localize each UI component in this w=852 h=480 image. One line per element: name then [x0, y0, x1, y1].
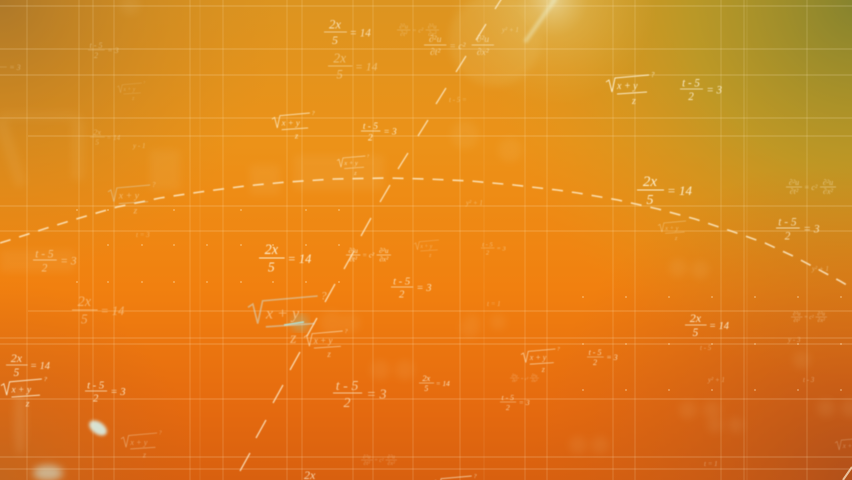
- equation: wave equation top wide: ∂²u: [476, 34, 489, 45]
- equation: 2x over 5 = 14 grey: 2x: [78, 294, 92, 310]
- equation: wave equation bottom faint: ∂²u: [363, 455, 371, 461]
- equation: 2x over 5 = 14 bright: 5: [646, 193, 654, 208]
- equation: wave equation bottom faint: [361, 455, 397, 467]
- equation: wave equation bottom faint: ∂²u: [388, 455, 395, 461]
- equation: root of x+y over z faint: x + y: [122, 87, 136, 93]
- tiny faint equation fragments: t = 1: [487, 300, 501, 308]
- equation: root of x+y over z grey: z: [132, 205, 137, 216]
- equation: root of x+y over z faint center: [414, 240, 439, 259]
- equation: 2x over 5 = 14 small: 5: [424, 384, 428, 393]
- equation: 2x over 5 = 14 small faint: = 14: [106, 134, 121, 142]
- equation: 2x over 5 = 14 faint: 5: [337, 68, 343, 82]
- equation: wave equation bottom faint: ∂x²: [388, 461, 395, 467]
- equation: t-5 over 2 = 3 center: t - 5: [393, 277, 411, 288]
- equation: root of x+y over z grey: x + y: [118, 191, 140, 202]
- equation: t-5 over 2 = 3: 2: [368, 133, 373, 143]
- equation: root of x+y over z faint center: x + y: [419, 244, 433, 250]
- equation: wave equation top faint: ∂²u: [428, 23, 437, 30]
- equation: 2x over 5 = 14 small: = 14: [436, 380, 450, 388]
- equation: root of x+y over z center: ?: [344, 328, 348, 335]
- equation: t-5 over 2 = 3 right: t - 5: [778, 216, 797, 228]
- equation: 2x over 5 = 14 faint: 2x: [333, 50, 346, 65]
- equation: wave equation top wide: ∂²u: [429, 34, 442, 45]
- equation: root top cut off at bottom: ?: [473, 473, 477, 480]
- equation: root of x+y over z: [272, 111, 316, 141]
- equation: 2x over 5 = 14 faint: [328, 50, 378, 82]
- tiny faint equation fragments: t = 1: [704, 460, 718, 468]
- equation: t-5 over 2 = 3 left: 2: [42, 262, 48, 274]
- tiny faint equation fragments: y - 3: [787, 336, 801, 344]
- tiny faint equation fragments: y² + 1: [501, 26, 519, 34]
- equation: root of x+y over z small: z: [353, 170, 357, 177]
- dashed arc: [0, 178, 852, 288]
- equation: 2x over 5 = 14 left: [6, 351, 50, 379]
- equation: root of x+y over z faint lower: z: [142, 450, 147, 459]
- equation: t-5 over 2 = 3: [361, 122, 397, 143]
- equation: 2x over 5 = 14 small: 2x: [422, 374, 431, 383]
- equation: wave equation lower center: ∂x²: [531, 378, 538, 384]
- equation: wave equation center: ∂²u: [379, 247, 389, 255]
- equation: wave equation center: [346, 247, 391, 263]
- tiny faint equation fragments: t = 3: [136, 231, 150, 239]
- equation: wave equation center: = c²: [362, 252, 375, 260]
- equation: root of x+y over z: x + y: [616, 81, 638, 92]
- equation: wave equation top wide: ∂x²: [477, 47, 490, 58]
- equation: t-5 over 2 = 3 small: t - 5: [502, 393, 514, 402]
- equation: wave equation top faint: ∂t²: [400, 31, 408, 38]
- equation: wave equation top faint: [397, 23, 439, 38]
- equation: root of x+y over z left: z: [25, 400, 30, 410]
- equation: t-5 over 2 = 3 large: = 3: [366, 386, 386, 402]
- equation: root of x+y over z grey: [108, 182, 156, 216]
- equation: root of x+y over z: ?: [312, 111, 316, 117]
- equation: t-5 over 2 = 3: = 3: [383, 128, 397, 138]
- equation: wave equation lower right: = c²: [804, 315, 814, 321]
- equation: wave equation top wide: ∂t²: [430, 47, 442, 58]
- equation: 2x over 5 = 14: [324, 18, 371, 47]
- equation: t-5 over 2 = 3 faint: [88, 41, 119, 60]
- equation: root of x+y over z on arc: x + y: [664, 225, 679, 232]
- equation: 2x over 5 = 14 center: 5: [268, 259, 275, 274]
- corner line fragment bottom right: [843, 467, 852, 480]
- equation: wave equation center: ∂t²: [349, 255, 358, 263]
- equation: t-5 over 2 = 3 small: = 3: [519, 398, 530, 407]
- equation: t-5 over 2 = 3: [680, 77, 723, 103]
- equation: wave equation center: ∂x²: [379, 255, 389, 263]
- equation: root of x+y over z faint lower: x + y: [129, 438, 148, 447]
- equation: t-5 over 2 = 3 left: t - 5: [35, 248, 54, 260]
- equation: root of x+y over z faint lower: ?: [159, 431, 162, 437]
- equation: t-5 over 2 = 3 right: [776, 216, 820, 242]
- equation: wave equation lower center: ∂²u: [512, 373, 518, 379]
- equation: t-5 over 2 = 3 small right: 2: [593, 358, 597, 367]
- equation: wave equation top faint: = c²: [412, 28, 424, 35]
- equation: wave equation lower center: ∂²u: [531, 373, 538, 379]
- tiny faint equation fragments: y - 1: [132, 142, 145, 150]
- equation: t-5 over 2 = 3 faint: 2: [94, 51, 98, 60]
- equation: t-5 over 2 = 3 faint: = 3: [107, 46, 119, 55]
- equation: wave equation top wide: = c²: [449, 41, 467, 52]
- equation: 2x over 5 = 14 center: = 14: [288, 252, 311, 266]
- equation: wave equation lower right: ∂x²: [818, 318, 825, 324]
- equation: wave equation center: ∂²u: [349, 247, 358, 255]
- equation: t-5 over 2 = 3 small right: [587, 348, 618, 367]
- equation: t-5 over 2 = 3 center: 2: [399, 290, 405, 301]
- equation: t-5 over 2 = 3 lower left: 2: [93, 394, 99, 405]
- equation: 2x over 5 = 14 small: [419, 374, 450, 393]
- equation: root of x+y over z faint: [117, 80, 145, 102]
- equation: t-5 over 2 = 3 small right: t - 5: [589, 348, 602, 357]
- equation: wave equation: [786, 178, 836, 196]
- tiny faint equation fragments: [132, 26, 829, 468]
- equation: 2x over 5 = 14 grey: [72, 294, 124, 326]
- tiny faint equation fragments: y² + 1: [811, 265, 829, 273]
- equation: root of x+y over z right: ?: [557, 347, 560, 353]
- equation: t-5 over 2 = 3 left: = 3: [60, 255, 77, 267]
- equation: 2x over 5 = 14 center: 2x: [265, 242, 279, 258]
- equation: root of x+y over z: ?: [651, 71, 655, 79]
- equation: root of x+y over z faint: ?: [143, 80, 145, 85]
- equation: 2x over 5 = 14 lower right: [685, 311, 729, 339]
- equation: t-5 over 2 = 3 lower left: = 3: [110, 387, 126, 398]
- equation: 2x over 5 = 14: = 14: [349, 27, 371, 39]
- equation: root of x+y over z left: [1, 376, 48, 410]
- equation: root of x+y over z right: x + y: [529, 353, 547, 362]
- equation: root of x+y over z grey: ?: [152, 182, 156, 189]
- tiny faint equation fragments: t - 3: [803, 376, 815, 384]
- equation: root of x+y over z right: z: [541, 365, 546, 374]
- equation: wave equation lower right: ∂t²: [794, 318, 800, 324]
- equation: 2x over 5 = 14 grey: 5: [81, 311, 88, 326]
- equation: 2x over 5 = 14 center: [259, 242, 311, 274]
- equation: root of x+y over z small: x + y: [343, 160, 358, 167]
- equation: 2x over 5 = 14 faint: = 14: [355, 61, 378, 74]
- equation: 2x over 5 = 14 small faint: 5: [95, 138, 99, 147]
- equation: wave equation top faint: ∂²u: [399, 23, 409, 30]
- equation: t-5 over 2 = 3 small faint: [481, 242, 507, 256]
- equation: fragment = 3 at left edge: [0, 63, 21, 72]
- equation: 2x over 5 = 14: 2x: [329, 18, 341, 32]
- equation: wave equation top wide: [424, 34, 494, 58]
- equation: wave equation lower center: ∂t²: [512, 378, 518, 384]
- equation: t-5 over 2 = 3 right: 2: [785, 230, 791, 242]
- equation: root of x+y over z center: [304, 328, 348, 359]
- equation: root of x+y over z faint lower: [121, 431, 162, 459]
- equation: 2x over 5 = 14 bright: 2x: [643, 174, 657, 190]
- equation: wave equation: ∂²u: [823, 178, 833, 187]
- equation: 2x over 5 = 14 left: 2x: [11, 351, 23, 365]
- tiny faint equation fragments: y² + 1: [707, 376, 725, 384]
- equation: wave equation lower center: [510, 373, 539, 384]
- equation: 2x over 5 = 14 small faint: 2x: [93, 128, 101, 137]
- equation: t-5 over 2 = 3: t - 5: [682, 77, 700, 89]
- equation: t-5 over 2 = 3 lower left: [85, 381, 126, 405]
- equation: wave equation bottom faint: = c²: [374, 458, 384, 464]
- equation: large root of x+y over z: ?: [321, 290, 327, 302]
- equation: root of x+y over z on arc: [658, 221, 686, 242]
- equation: t-5 over 2 = 3 lower left: t - 5: [87, 381, 105, 392]
- equation: wave equation: = c²: [804, 183, 818, 192]
- glass light streak and glint bottom left: [14, 384, 110, 480]
- equation: 2x over 5 = 14 left: 5: [14, 367, 20, 379]
- equation: wave equation top faint: ∂x²: [428, 31, 437, 38]
- equation: root of x+y over z on arc: z: [674, 235, 678, 242]
- equation: root of x+y over z left: x + y: [10, 385, 32, 395]
- equation: 2x over 5 = 14: 5: [332, 33, 338, 47]
- equation: wave equation: ∂²u: [789, 178, 799, 187]
- equation: t-5 over 2 = 3: 2: [688, 91, 694, 103]
- equation: wave equation lower right: [791, 312, 827, 324]
- equation: t-5 over 2 = 3 small faint: = 3: [496, 246, 507, 252]
- equation: 2x over 5 = 14 lower right: = 14: [709, 321, 729, 332]
- equation: root of x+y over z left: ?: [44, 376, 48, 383]
- equation: root of x+y over z: x + y: [281, 117, 300, 127]
- equation: t-5 over 2 = 3 large: 2: [344, 395, 351, 411]
- equation: large root of x+y over z: x + y: [265, 305, 300, 323]
- equation: root top cut off at bottom: [433, 473, 478, 480]
- equation: 2x over 5 = 14 bright: = 14: [667, 183, 693, 198]
- equation: t-5 over 2 = 3 small right: = 3: [606, 353, 618, 362]
- equation: t-5 over 2 = 3 large: t - 5: [336, 378, 358, 394]
- tiny faint equation fragments: t - 5: [700, 344, 712, 352]
- equation: root of x+y over z faint: z: [131, 96, 135, 102]
- equation: t-5 over 2 = 3 small: [500, 393, 530, 412]
- equation: root of x+y over z right: [521, 347, 560, 374]
- equation: large root of x+y over z: [248, 290, 327, 347]
- equation: root of x+y over z small: [337, 153, 370, 177]
- equation: 2x over 5 = 14 lower right: 2x: [690, 311, 702, 325]
- grid node dots: [76, 209, 842, 391]
- equation: wave equation: ∂x²: [823, 187, 834, 196]
- equation: root of x+y over z center: z: [326, 349, 331, 359]
- equation: root of x+y over z small: ?: [367, 153, 370, 158]
- equation: t-5 over 2 = 3: t - 5: [363, 122, 378, 132]
- tiny faint equation fragments: y² + 1: [465, 199, 483, 207]
- equation: root of x+y over z faint center: z: [428, 253, 432, 259]
- equation: 2x over 5 = 14 small faint: [90, 128, 121, 147]
- equation: fragment = 3 at left edge: = 3: [9, 63, 21, 72]
- dashed diagonal line: [240, 0, 504, 471]
- equation: wave equation: ∂t²: [790, 187, 799, 196]
- tiny faint equation fragments: t - 5 =: [449, 96, 467, 104]
- equation: t-5 over 2 = 3 center: = 3: [416, 283, 432, 294]
- equation: wave equation bottom faint: ∂t²: [364, 461, 370, 467]
- equation: root of x+y over z: [606, 71, 655, 107]
- cyan glint on large root: [284, 314, 309, 332]
- equation: 2x over 5 = 14 grey: = 14: [101, 304, 124, 318]
- equation: root at right edge: [835, 438, 852, 450]
- equation: t-5 over 2 = 3 center: [391, 277, 432, 301]
- equation: t-5 over 2 = 3 large: [333, 378, 386, 411]
- equation: wave equation lower right: ∂²u: [793, 312, 801, 318]
- equation: t-5 over 2 = 3 small: 2: [506, 403, 510, 412]
- equation: t-5 over 2 = 3 faint: t - 5: [90, 41, 103, 50]
- equation: t-5 over 2 = 3: = 3: [706, 84, 723, 96]
- equation: t-5 over 2 = 3 small faint: t - 5: [482, 242, 493, 248]
- equation: t-5 over 2 = 3 small faint: 2: [486, 250, 490, 256]
- equation: wave equation lower center: = c²: [520, 376, 529, 382]
- equation: 2x over 5 = 14 lower right: 5: [693, 327, 699, 339]
- equation: 2x over 5 = 14 bright: [637, 174, 693, 208]
- equation: root of x+y over z center: x + y: [313, 336, 332, 346]
- equation: t-5 over 2 = 3 left: [33, 248, 77, 274]
- equation: 2x over 5 = 14 left: = 14: [30, 361, 50, 372]
- equation: large root of x+y over z: z: [289, 329, 297, 347]
- equation: root of x+y over z: z: [294, 131, 299, 141]
- lens flare top: [420, 0, 690, 120]
- equation: t-5 over 2 = 3 right: = 3: [803, 223, 820, 235]
- equation: wave equation lower right: ∂²u: [818, 312, 825, 318]
- equation: root of x+y over z: z: [631, 96, 636, 107]
